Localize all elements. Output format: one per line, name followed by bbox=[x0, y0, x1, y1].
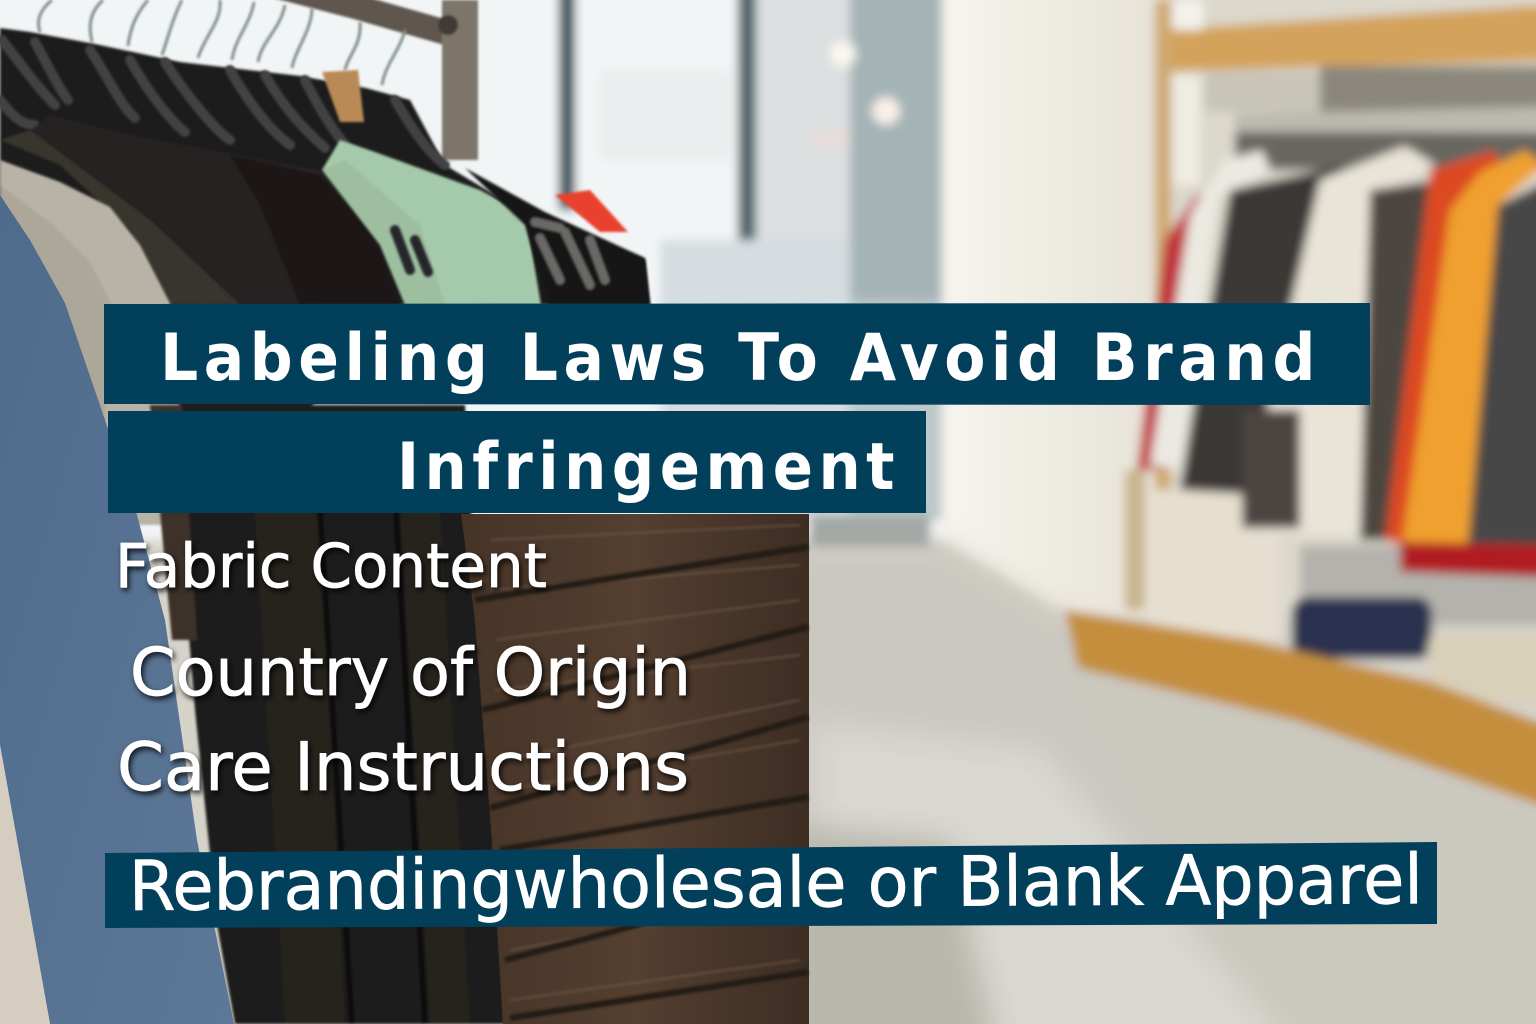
list item: Country of Origin: Country of Origin bbox=[130, 634, 691, 711]
floor bbox=[790, 545, 1536, 1024]
wooden display panel bbox=[461, 514, 809, 1024]
black hangers bbox=[0, 40, 445, 165]
green garments bbox=[322, 140, 541, 305]
lower wooden shelf bbox=[1065, 610, 1536, 812]
list item: Care Instructions: Care Instructions bbox=[117, 728, 689, 806]
dark garment with clips and red garment bbox=[395, 168, 650, 305]
rack rail and post bbox=[262, 0, 478, 160]
background window bbox=[0, 0, 950, 540]
hang tag bbox=[322, 70, 364, 122]
title bar: second line: Infringement bbox=[397, 430, 900, 505]
right clothes bbox=[1137, 146, 1536, 578]
title bar: first line bbox=[104, 303, 1370, 405]
lower shelf items bbox=[1150, 490, 1280, 640]
top shelf bbox=[1160, 4, 1536, 72]
pale garment strip bbox=[0, 745, 50, 1024]
title bbox=[104, 303, 1370, 513]
list item: Fabric Content: Fabric Content bbox=[115, 531, 547, 602]
dark garments bbox=[0, 28, 650, 420]
title bar: first line: Labeling Laws To Avoid Brand bbox=[160, 321, 1321, 396]
left clothing rack bbox=[0, 0, 650, 1024]
black garment lower bbox=[150, 405, 505, 1024]
title bar: second line bbox=[108, 411, 926, 513]
knit garments bbox=[0, 115, 400, 305]
beige garments bbox=[0, 160, 190, 525]
blue sweater bbox=[0, 195, 234, 1024]
hanger hooks bbox=[38, 0, 405, 85]
background column bbox=[942, 0, 1160, 620]
banner: Rebranding wholesale or blank apparel: Rebrandingwholesale or Blank Apparel bbox=[129, 840, 1423, 927]
background right wall bbox=[1160, 0, 1536, 620]
